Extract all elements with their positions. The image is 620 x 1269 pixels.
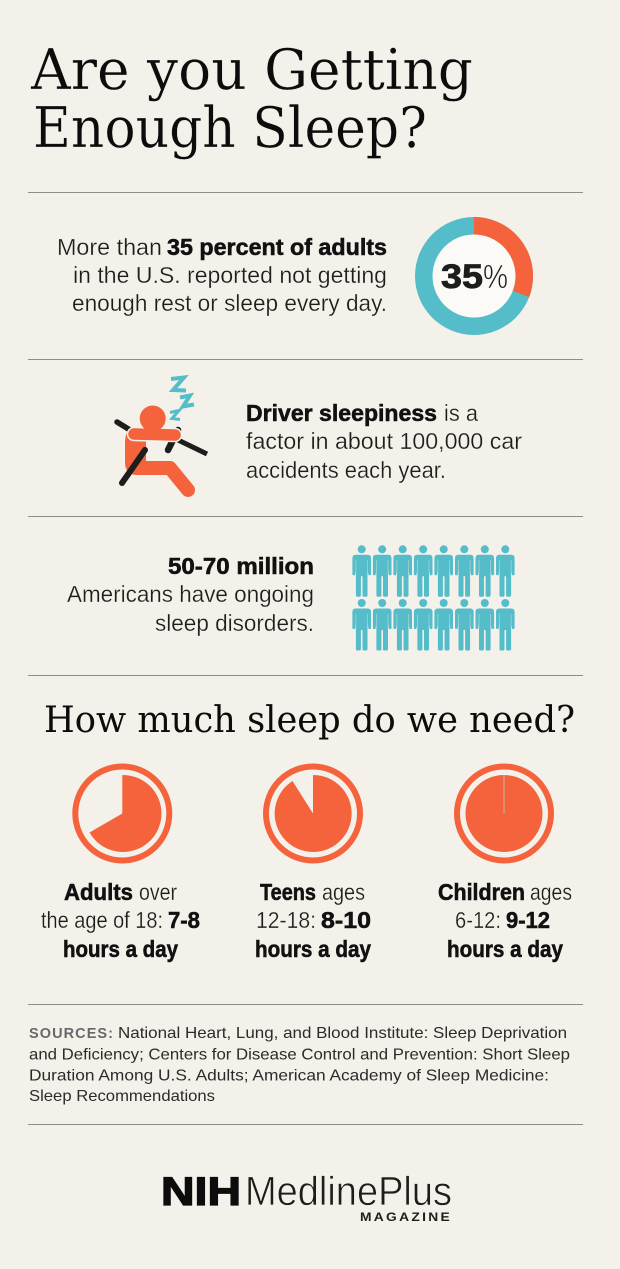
text: 35 percent of adults statistic: 35 percent of adults: [167, 234, 387, 260]
logo: NIH MedlinePlus Magazine: MedlinePlus: [245, 1168, 452, 1214]
text: 35 percent of adults statistic: enough rest or sleep every day.: [72, 290, 387, 316]
sources: Duration Among U.S. Adults; American Academy of Sleep Medicine:: [29, 1068, 549, 1084]
title: [30, 38, 473, 161]
text: children: hours a day: [447, 936, 563, 962]
icon: snoring Z letters: [170, 378, 194, 420]
logo: NIH MedlinePlus Magazine: [161, 1168, 452, 1224]
text: adults: Adults: [64, 879, 133, 905]
text: teens: hours a day: [255, 936, 371, 962]
sources: Sleep Recommendations: [29, 1088, 215, 1105]
text: teens: 8-10: [321, 907, 371, 933]
text: adults: [41, 879, 200, 962]
donut chart: 35%: 35: [441, 258, 483, 296]
text: teens: 12-18:: [256, 907, 316, 933]
donut chart: 35%: %: [483, 258, 508, 295]
text: driver sleepiness statistic: [246, 400, 522, 483]
clock: teens: [266, 766, 360, 860]
text: sleep disorders statistic: 50-70 million: [168, 553, 314, 579]
text: children: Children: [438, 879, 525, 905]
text: sleep disorders statistic: sleep disorders.: [155, 610, 314, 636]
text: adults: 7-8: [168, 907, 200, 933]
title: Enough Sleep?: [33, 96, 427, 161]
sources: SOURCES:: [29, 1026, 113, 1042]
text: teens: Teens: [260, 879, 316, 905]
text: 35 percent of adults statistic: More than: [57, 234, 162, 260]
title: Are you Getting: [30, 38, 473, 103]
logo: NIH MedlinePlus Magazine: NIH: [161, 1170, 241, 1214]
text: driver sleepiness statistic: Driver sleepiness: [246, 400, 437, 426]
sources: [29, 1025, 570, 1105]
text: 35 percent of adults statistic: [57, 234, 387, 316]
text: driver sleepiness statistic: factor in about 100,000 car: [246, 428, 522, 454]
text: 35 percent of adults statistic: in the U.S. reported not getting: [73, 262, 387, 288]
text: driver sleepiness statistic: accidents each year.: [246, 457, 446, 483]
donut chart: 35%: [415, 217, 533, 335]
logo: NIH MedlinePlus Magazine: MAGAZINE: [360, 1210, 452, 1224]
sources: National Heart, Lung, and Blood Institute: Sleep Deprivation: [118, 1025, 567, 1042]
text: children: [438, 879, 572, 962]
text: adults: the age of 18:: [41, 907, 163, 933]
text: teens: [255, 879, 371, 962]
heading: how much sleep: How much sleep do we need?: [44, 700, 575, 741]
sources: and Deficiency; Centers for Disease Control and Prevention: Short Sleep: [29, 1046, 570, 1064]
text: teens: ages: [322, 879, 365, 905]
text: children: ages: [530, 879, 572, 905]
text: adults: over: [139, 879, 177, 905]
text: children: 6-12:: [455, 907, 501, 933]
text: children: 9-12: [506, 907, 550, 933]
text: adults: hours a day: [63, 936, 178, 962]
clock: children: [457, 766, 551, 860]
clock: adults: [75, 766, 169, 860]
text: sleep disorders statistic: Americans have ongoing: [67, 581, 314, 607]
icon: sleeping driver: [117, 378, 207, 490]
icon: grid of people: [352, 545, 515, 650]
text: sleep disorders statistic: [67, 553, 314, 636]
text: driver sleepiness statistic: is a: [444, 400, 478, 426]
